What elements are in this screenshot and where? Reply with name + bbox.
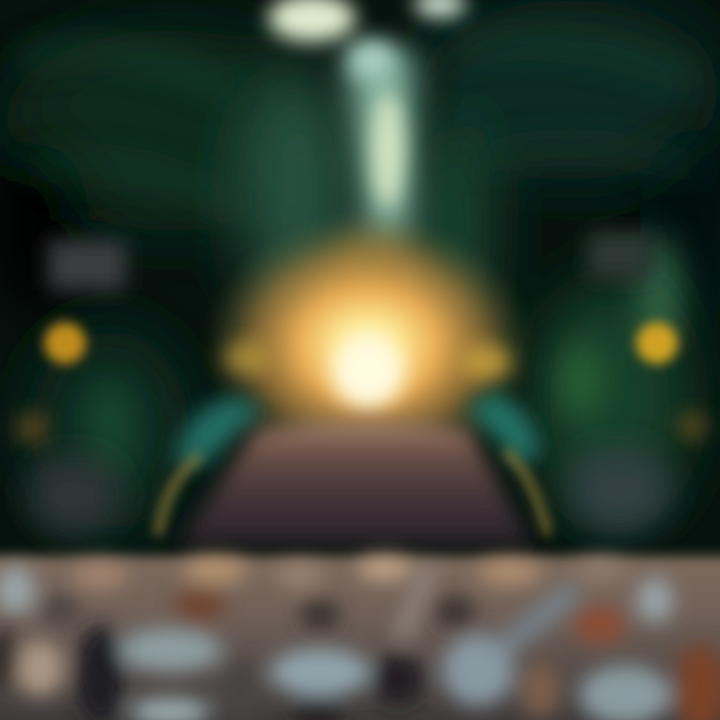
- crowd: back row tones: [0, 556, 673, 643]
- left light and panel: [16, 240, 126, 535]
- sun glow: [203, 215, 533, 475]
- foliage texture: [20, 40, 700, 478]
- light beam from canopy: [268, 0, 466, 340]
- yellow stage arcs: [158, 450, 548, 535]
- teal wings: [175, 392, 540, 465]
- crowd: [0, 556, 720, 720]
- stage: [178, 420, 532, 545]
- right light and panel: [568, 232, 706, 532]
- crowd: front row bodies: [0, 565, 720, 720]
